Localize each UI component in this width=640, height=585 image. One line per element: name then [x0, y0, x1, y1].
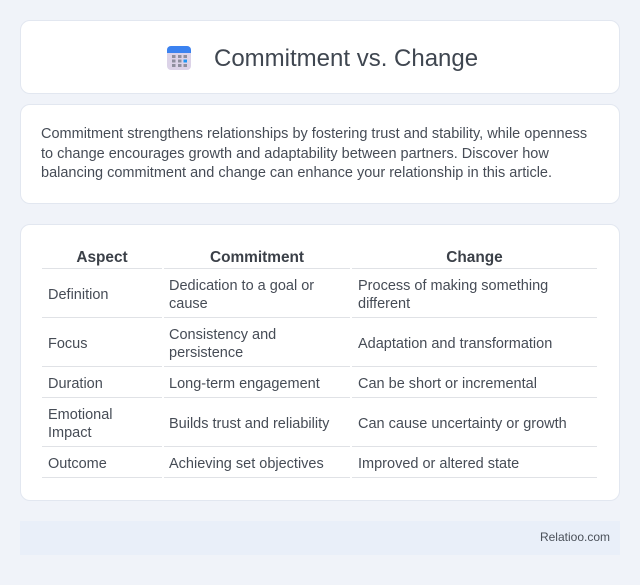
title text: Commitment vs. Change — [214, 45, 478, 72]
panel: comparison table — [20, 224, 620, 501]
row: Duration: Duration — [48, 376, 103, 392]
intro text — [41, 126, 587, 181]
intro text: Commitment strengthens relationships by fostering trust and stability, while openness — [41, 126, 587, 142]
Definition: change: Process of making something — [358, 278, 548, 294]
Outcome: commitment: Achieving set objectives — [169, 456, 324, 472]
footer text: Relatioo.com — [540, 530, 610, 544]
header: Commitment: Commitment — [210, 249, 304, 266]
Duration: change: Can be short or incremental — [358, 376, 537, 392]
icon: calendar — [167, 46, 191, 70]
Definition: commitment: Dedication to a goal or — [169, 278, 314, 294]
Definition: commitment — [169, 278, 314, 312]
panel: introduction — [20, 104, 620, 204]
Outcome: change: Improved or altered state — [358, 456, 519, 472]
Emotional Impact: commitment: Builds trust and reliability — [169, 416, 329, 432]
Definition: change: different — [358, 296, 410, 312]
header: Change: Change — [446, 249, 503, 266]
row: Emotional Impact: Emotional — [48, 407, 112, 423]
Focus: commitment: persistence — [169, 345, 243, 361]
row: Outcome: Outcome — [48, 456, 107, 472]
intro text: balancing commitment and change can enhance your relationship in this article. — [41, 165, 552, 181]
header: Aspect: Aspect — [76, 249, 128, 266]
row: Emotional Impact: Impact — [48, 425, 92, 441]
Focus: commitment: Consistency and — [169, 327, 276, 343]
row: Focus: Focus — [48, 336, 88, 352]
footer bar — [20, 521, 620, 555]
Focus: commitment — [169, 327, 276, 361]
row: Emotional Impact — [48, 407, 112, 441]
Duration: commitment: Long-term engagement — [169, 376, 320, 392]
Definition: change — [358, 278, 548, 312]
panel: title — [20, 20, 620, 94]
Emotional Impact: change: Can cause uncertainty or growth — [358, 416, 567, 432]
Focus: change: Adaptation and transformation — [358, 336, 552, 352]
intro text: to change encourages growth and adaptability between partners. Discover how — [41, 146, 549, 162]
Definition: commitment: cause — [169, 296, 208, 312]
row: Definition: Definition — [48, 287, 108, 303]
